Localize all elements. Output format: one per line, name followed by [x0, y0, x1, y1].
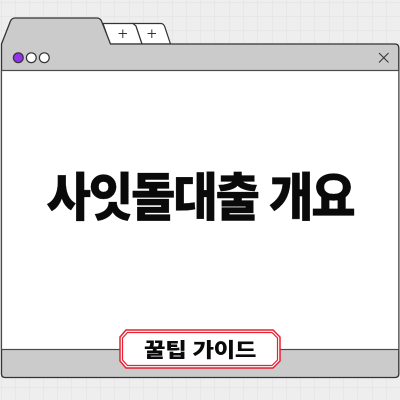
badge outline: [120, 330, 280, 368]
inactive tab 2: [133, 24, 170, 44]
tab plus icons: [118, 30, 156, 38]
badge label: 꿀팁 가이드: [144, 339, 256, 362]
close icon: [379, 53, 388, 62]
inactive tab 1: [103, 24, 142, 44]
title: 사잇돌대출 개요: [47, 169, 355, 227]
window control dots: [13, 53, 49, 63]
content area: [2, 70, 399, 350]
badge: [120, 330, 280, 368]
